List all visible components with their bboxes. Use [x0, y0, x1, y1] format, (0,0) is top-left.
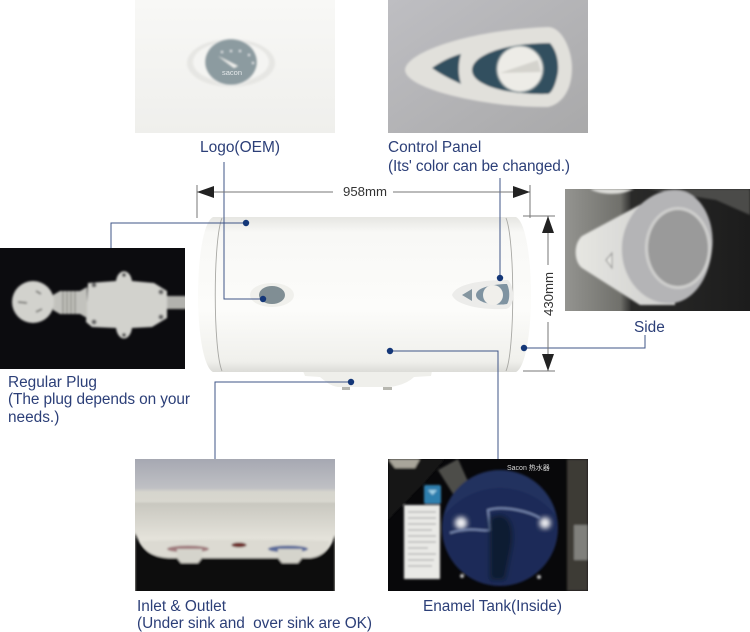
illustration: water heater	[198, 217, 531, 390]
left cap seam	[215, 218, 222, 371]
photo: logo dial	[135, 0, 335, 133]
photo: inlet and outlet	[135, 459, 335, 595]
callout dots	[243, 220, 527, 385]
right cap seam	[506, 218, 513, 371]
text: inlet and outlet label: Inlet & Outlet	[137, 598, 227, 615]
photo: control panel	[388, 0, 588, 133]
text: inlet and outlet label: (Under sink and over sink are OK)	[137, 615, 372, 632]
leader lines	[111, 162, 645, 459]
control panel on tank	[452, 280, 513, 309]
height dimension: 430mm	[523, 216, 556, 371]
text: plug label: Regular Plug	[8, 374, 97, 391]
photo: regular plug	[0, 248, 187, 369]
text: enamel tank label: Enamel Tank(Inside)	[423, 598, 562, 615]
text: control panel label: (Its' color can be changed.)	[388, 158, 570, 175]
photo: logo dial: sacon	[222, 68, 242, 77]
text: plug label: needs.)	[8, 409, 59, 426]
photo: side view	[565, 189, 750, 311]
height dimension: 430mm: 430mm	[541, 272, 556, 316]
text: plug label: (The plug depends on your	[8, 391, 190, 408]
width dimension: 958mm: 958mm	[343, 184, 387, 199]
photo: enamel tank	[388, 459, 588, 591]
tank body	[198, 217, 531, 372]
heading: logo label: Logo(OEM)	[200, 139, 280, 156]
width dimension: 958mm	[197, 184, 530, 218]
mounting bracket	[303, 371, 432, 387]
photo: enamel tank: Sacon 热水器	[507, 463, 550, 472]
pipe stubs	[342, 387, 392, 390]
text: control panel label: Control Panel	[388, 139, 481, 156]
logo dial on tank	[250, 283, 294, 307]
text: side label: Side	[634, 319, 665, 336]
